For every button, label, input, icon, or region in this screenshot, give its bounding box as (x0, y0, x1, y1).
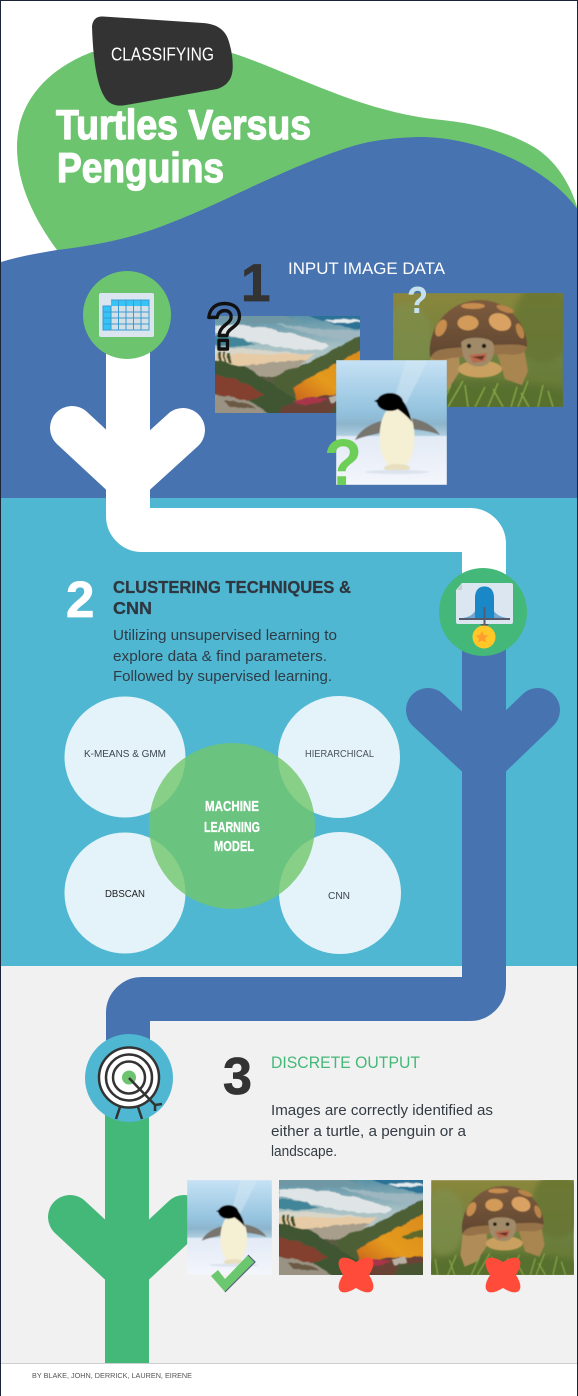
circle: hierarchical: HIERARCHICAL (305, 749, 374, 760)
step 3 description (271, 1103, 493, 1160)
icon: check mark (211, 1255, 255, 1292)
circle: k-means and GMM (64, 696, 186, 818)
step number 1: 1 (241, 254, 270, 313)
circle: machine learning model: MODEL (214, 839, 254, 855)
section 2 background: teal panel (0, 498, 578, 966)
circle: CNN (279, 832, 401, 954)
circle: k-means and GMM: K-MEANS & GMM (84, 749, 166, 760)
photo: turtle (378, 283, 578, 417)
step 3 heading: DISCRETE OUTPUT (271, 1054, 420, 1072)
title badge: CLASSIFYING (111, 44, 214, 64)
step 2 description: Utilizing unsupervised learning to (113, 628, 337, 644)
step 3 description: landscape. (271, 1144, 337, 1160)
photo: landscape (210, 311, 365, 418)
question mark: light blue: ? (407, 280, 428, 322)
circle: hierarchical (278, 696, 400, 818)
circle: DBSCAN (64, 832, 186, 954)
output photo: landscape (274, 1175, 428, 1280)
footer divider (0, 1363, 578, 1364)
step 3 description: Images are correctly identified as (271, 1103, 493, 1119)
footer credits: BY BLAKE, JOHN, DERRICK, LAUREN, EIRENE (32, 1371, 192, 1380)
step 3 description: either a turtle, a penguin or a (271, 1124, 467, 1140)
flow arrow: white, step 1 to step 2 (72, 340, 484, 600)
step 2 heading: CNN (113, 598, 152, 618)
photo: penguin (336, 360, 447, 485)
icon: red cross 1 (333, 1252, 379, 1298)
icon: bell curve with medal (439, 568, 527, 656)
step 2 description: explore data & find parameters. (113, 649, 327, 665)
circle: machine learning model: LEARNING (204, 820, 260, 836)
step 2 heading: CLUSTERING TECHNIQUES & (113, 577, 351, 597)
step 1 heading: INPUT IMAGE DATA (288, 259, 446, 278)
step 2 heading (113, 577, 351, 618)
title: Turtles Versus (56, 101, 311, 148)
icon: red cross 2 (480, 1252, 526, 1298)
title: Penguins (57, 144, 224, 191)
section 3 background: grey panel (0, 966, 578, 1363)
flow arrow: blue, step 2 to step 3 (128, 640, 538, 1060)
question mark: green: ? (324, 425, 362, 499)
icon: data table (83, 271, 171, 359)
output photo: turtle (418, 1172, 578, 1283)
flow arrow: green, step 3 to output (70, 1100, 184, 1363)
section 1 header: green blob (17, 52, 578, 300)
step 2 description: Followed by supervised learning. (113, 669, 332, 685)
step number 2: 2 (66, 571, 94, 628)
circle: machine learning model: MACHINE (205, 799, 259, 815)
title (56, 101, 311, 191)
title badge (92, 16, 233, 106)
question mark: black outline: ? (206, 290, 243, 363)
circle: machine learning model (149, 743, 315, 909)
step 2 description (113, 628, 337, 685)
step number 3: 3 (223, 1048, 252, 1106)
output photo: penguin (187, 1180, 272, 1275)
circle: CNN: CNN (328, 891, 350, 902)
section 1 background: blue wave (1, 137, 578, 498)
icon: target with arrow (85, 1034, 173, 1122)
circle: DBSCAN: DBSCAN (105, 889, 145, 900)
